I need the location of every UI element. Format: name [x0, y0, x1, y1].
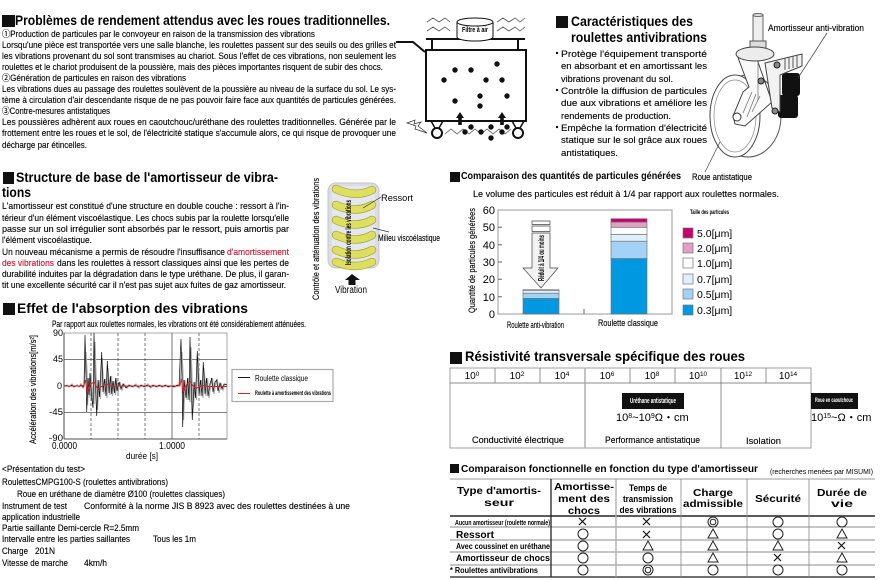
text block: présentation du test: Intervalle entre les parties saillantes: [2, 534, 130, 544]
legend: taille des particules: 0.3[μm]: [697, 305, 732, 317]
text block: structure: Un nouveau mécanisme a permis de résoudre l'insuffisance: [2, 247, 225, 257]
line chart: accélération des vibrations: 0.0000: [52, 441, 77, 452]
text block: problèmes: [2, 29, 396, 150]
table header: seur: [484, 498, 514, 509]
heading: caractéristiques: [556, 13, 707, 45]
illustration: chariot et particules: Filtre à air: [462, 27, 488, 34]
table row labels: Aucun amortisseur (roulette normale): [455, 520, 550, 527]
label: roue en caoutchouc: 10: [811, 412, 823, 424]
text block: caractéristiques: due aux vibrations et améliore les: [561, 98, 708, 108]
table header: ment des: [558, 494, 611, 505]
table: comparaison fonctionnelle: [450, 479, 875, 577]
table header: [457, 482, 868, 517]
line chart: accélération des vibrations: 1.0000: [159, 441, 185, 452]
table: résistivité: Isolation: [746, 436, 781, 446]
table header: admissible: [683, 499, 743, 510]
illustration: roulette antivibration: [710, 14, 802, 157]
legend: taille des particules: 2.0[μm]: [697, 243, 732, 255]
table header: transmission: [623, 494, 673, 504]
legend: vibrations: Roulette à amortissement des vibrations: [255, 391, 331, 397]
legend: vibrations: [232, 370, 333, 402]
table row labels: Avec coussinet en uréthane: [456, 542, 550, 551]
bar chart: quantités de particules: [483, 205, 672, 321]
heading: résistivité: Résistivité transversale spécifique des roues: [465, 348, 745, 364]
legend: taille des particules: 0.7[μm]: [697, 274, 732, 286]
subtitle: vibrations: Par rapport aux roulettes normales, les vibrations ont été considérablement atténuées.: [52, 319, 306, 329]
line chart: accélération des vibrations: 0: [57, 381, 62, 391]
text block: caractéristiques: antistatiques.: [561, 148, 618, 158]
line chart: accélération des vibrations: 45: [53, 354, 63, 364]
table: résistivité: 10: [645, 371, 656, 382]
text block: structure: [2, 201, 289, 290]
text block: problèmes: ③Contre-mesures antistatiques: [2, 106, 110, 116]
text block: caractéristiques: Contrôle la diffusion de particules: [561, 86, 708, 96]
text block: présentation du test: Partie saillante Demi-cercle R=2.5mm: [2, 523, 139, 533]
bar chart: quantités de particules: 50: [483, 222, 495, 234]
legend: taille des particules: 0.5[μm]: [697, 289, 732, 301]
legend: vibrations: Roulette classique: [255, 374, 308, 383]
line chart: accélération des vibrations: -90: [49, 433, 63, 443]
table header: Sécurité: [755, 494, 802, 505]
table: résistivité: 10: [510, 371, 521, 382]
diagram: ressort dans le milieu viscoélastique: [328, 183, 379, 268]
label: amortisseur anti-vibration: [768, 23, 864, 78]
legend: taille des particules: 5.0[μm]: [697, 228, 732, 240]
heading: comparaison des particules: Comparaison des quantités de particules générées: [461, 171, 681, 182]
text block: présentation du test: <Présentation du test>: [2, 464, 85, 474]
label: roue antistatique: Roue antistatique: [692, 172, 752, 182]
label: uréthane antistatique: 8: [628, 413, 632, 420]
table header: des vibrations: [620, 505, 676, 515]
heading: structure: [2, 169, 278, 200]
text block: présentation du test: Tous les 1m: [153, 534, 196, 544]
bar chart: quantités de particules: 60: [483, 205, 495, 217]
heading: comparaison fonctionnelle: (recherches menées par MISUMI): [770, 469, 873, 476]
legend: taille des particules: 1.0[μm]: [697, 258, 732, 270]
table header: Type d'amortis-: [457, 486, 541, 497]
label: uréthane antistatique: 10: [616, 412, 628, 424]
bar chart: quantités de particules: 30: [483, 257, 495, 269]
heading: comparaison fonctionnelle: [450, 463, 873, 476]
table: résistivité: Conductivité électrique: [472, 435, 564, 445]
text block: problèmes: Lorsqu'une pièce est transportée vers une salle blanche, les roulettes passent sur des seuils ou des grilles et: [2, 40, 396, 50]
label: milieu viscoélastique: [373, 228, 440, 243]
heading: structure: tions: [2, 184, 31, 200]
table header: Temps de: [629, 483, 667, 493]
label: uréthane antistatique: [616, 393, 689, 424]
table: résistivité: 14: [790, 371, 798, 378]
text block: problèmes: les vibrations provenant du sol sont transmises au chariot. Sous l'effet de ces vibrations, non seulement les: [2, 51, 396, 61]
table: résistivité: 10: [600, 371, 611, 382]
table: résistivité: 2: [521, 371, 525, 378]
text block: caractéristiques: statique sur le sol grâce aux roues: [561, 135, 708, 145]
text block: structure: dans les roulettes à ressort classiques ainsi que les pertes de: [57, 258, 289, 268]
table: résistivité: 10: [734, 371, 745, 382]
text block: caractéristiques: en absorbant et en amortissant les: [561, 61, 708, 71]
legend: taille des particules: Taille des particules: [690, 210, 729, 216]
text block: structure: des vibrations: [2, 258, 54, 268]
text block: présentation du test: 4km/h: [84, 558, 107, 568]
text block: présentation du test: 201N: [35, 546, 55, 556]
heading: caractéristiques: Caractéristiques des: [571, 13, 693, 29]
table: résistivité: 10: [689, 371, 700, 382]
label: uréthane antistatique: Uréthane antistatique: [630, 398, 676, 405]
heading: effet de l'absorption: Effet de l'absorption des vibrations: [17, 300, 248, 316]
text block: présentation du test: application industrielle: [2, 512, 80, 522]
label: roue en caoutchouc: Roue en caoutchouc: [815, 398, 853, 404]
text block: problèmes: Les poussières adhèrent aux roues en caoutchouc/uréthane des roulettes traditionnelles. Générée par le: [2, 117, 396, 127]
text block: structure: l'élément viscoélastique.: [2, 235, 92, 245]
table header: vie: [831, 499, 854, 510]
diagram: ressort dans le milieu viscoélastique: Isolation contre les vibrations: [344, 200, 353, 265]
label: milieu viscoélastique: Milieu viscoélastique: [378, 233, 440, 243]
arrow: vibration: Vibration: [335, 285, 367, 296]
label: amortisseur anti-vibration: Amortisseur anti-vibration: [768, 23, 864, 33]
table: résistivité: 10: [465, 371, 476, 382]
table header: Charge: [693, 488, 734, 499]
label: ressort: [363, 193, 413, 208]
bar chart: quantités de particules: 10: [483, 292, 495, 304]
text block: présentation du test: RoulettesCMPG100-S (roulettes antivibrations): [2, 477, 168, 487]
table: résistivité: 10: [555, 371, 566, 382]
text block: caractéristiques: [556, 49, 708, 158]
axis label: durée: durée [s]: [126, 451, 158, 462]
legend: taille des particules: [683, 210, 732, 317]
table: résistivité: 12: [745, 371, 753, 378]
bar chart: quantités de particules: 20: [483, 274, 495, 286]
text block: structure: L'amortisseur est constitué d'une structure en double couche : ressort à l'in-: [2, 201, 289, 211]
heading: caractéristiques: roulettes antivibrations: [571, 29, 707, 45]
axis labels: catégories: Roulette anti-vibration: [507, 320, 564, 330]
axis labels: catégories: Roulette classique: [598, 318, 658, 328]
axis labels: catégories: [507, 318, 658, 330]
text block: caractéristiques: vibrations provenant du sol.: [561, 74, 673, 84]
arrow: réduit à 1/4: [523, 221, 558, 288]
text block: présentation du test: [2, 464, 350, 568]
text block: présentation du test: Instrument de test: [2, 501, 67, 511]
text block: problèmes: frottement entre les roues et le sol, de l'électricité statique s'accumule alors, ce qui risque de provoquer une: [2, 128, 396, 138]
bar chart: quantités de particules: 40: [483, 240, 495, 252]
table: résistivité: 10: [700, 371, 708, 378]
label: uréthane antistatique: Ω・cm: [655, 412, 689, 424]
text block: problèmes: ②Génération de particules en raison des vibrations: [2, 73, 186, 83]
subtitle: particules: Le volume des particules est réduit à 1/4 par rapport aux roulettes normales.: [473, 189, 779, 199]
bar chart: quantités de particules: 0: [489, 309, 495, 321]
table row labels: * Roulettes antivibrations: [450, 566, 538, 575]
table: résistivité: [450, 368, 811, 448]
text block: problèmes: décharge par étincelles.: [2, 140, 87, 150]
text block: structure: passe sur un sol irrégulier sont absorbés par le ressort, puis amortis par: [2, 224, 289, 234]
table: résistivité: 6: [611, 371, 615, 378]
text block: caractéristiques: Empêche la formation d'électricité: [561, 123, 707, 133]
text block: caractéristiques: rendements de production.: [561, 111, 671, 121]
label: roue antistatique: [692, 142, 752, 182]
table header: Amortisse-: [554, 482, 614, 493]
text block: structure: tit une excellente sécurité car il n'est pas sujet aux fuites de gaz amortisseur.: [2, 280, 286, 290]
label: uréthane antistatique: ~10: [632, 412, 651, 424]
text block: problèmes: Les vibrations dues au passage des roulettes soulèvent de la poussière au niveau de la surface du sol. Le sys-: [2, 84, 396, 94]
text block: présentation du test: Conformité à la norme JIS B 8923 avec des roulettes destinées à une: [84, 501, 350, 511]
text block: problèmes: tème à circulation d'air descendante risque de ne pas pouvoir faire face aux quantités de particules générées.: [2, 95, 396, 105]
label: roue en caoutchouc: [811, 393, 871, 424]
text block: structure: d'amortissement: [227, 247, 289, 257]
label: contrôle et atténuation: Contrôle et atténuation des vibrations: [311, 178, 321, 300]
text block: présentation du test: Roue en uréthane de diamètre Ø100 (roulettes classiques): [17, 489, 225, 499]
table header: chocs: [568, 506, 600, 517]
label: roue en caoutchouc: ~Ω・cm: [831, 412, 871, 424]
text block: problèmes: ①Production de particules par le convoyeur en raison de la transmission des vibrations: [2, 29, 315, 39]
axis label: accélération: Accélération des vibrations[m/s²]: [28, 335, 38, 444]
table marks: [578, 517, 847, 575]
heading: problèmes de rendement: Problèmes de rendement attendus avec les roues traditionnelles.: [15, 12, 390, 28]
line chart: accélération des vibrations: -45: [49, 407, 63, 417]
table: résistivité: Performance antistatique: [605, 435, 700, 445]
table row labels: Ressort: [456, 530, 495, 541]
illustration: chariot et particules: [396, 18, 526, 141]
text block: problèmes: roulettes et le chariot produisent de la poussière, mais des pièces importantes risquent de subir des chocs.: [2, 62, 383, 72]
text block: structure: durabilité induites par la dégradation dans le type uréthane. De plus, il garan-: [2, 269, 289, 279]
table header: Durée de: [817, 488, 868, 499]
axis label: quantité: Quantité de particules générées: [467, 208, 477, 313]
table: résistivité: 10: [779, 371, 790, 382]
text block: présentation du test: Vitesse de marche: [2, 558, 68, 568]
text block: structure: térieur d'un élément viscoélastique. Les chocs subis par la roulette lorsqu'elle: [2, 213, 289, 223]
table: résistivité: 0: [476, 371, 480, 378]
line chart: accélération des vibrations: [49, 328, 227, 452]
table row labels: Amortisseur de chocs: [456, 553, 550, 564]
line chart: accélération des vibrations: 90: [53, 328, 63, 338]
heading: structure: Structure de base de l'amortisseur de vibra-: [16, 169, 278, 185]
arrow: vibration: [335, 274, 367, 296]
heading: comparaison fonctionnelle: Comparaison fonctionnelle en fonction du type d'amortisseur: [461, 463, 758, 475]
label: uréthane antistatique: 9: [651, 413, 655, 420]
table: résistivité: 8: [656, 371, 660, 378]
text block: caractéristiques: Protège l'équipement transporté: [561, 49, 707, 59]
table row labels: [450, 520, 550, 575]
label: roue en caoutchouc: 15: [823, 413, 831, 420]
text block: présentation du test: Charge: [2, 546, 28, 556]
arrow: réduit à 1/4: Réduit à 1/4 ou moins: [537, 235, 546, 281]
table: résistivité: 4: [566, 371, 570, 378]
label: ressort: Ressort: [381, 193, 413, 204]
